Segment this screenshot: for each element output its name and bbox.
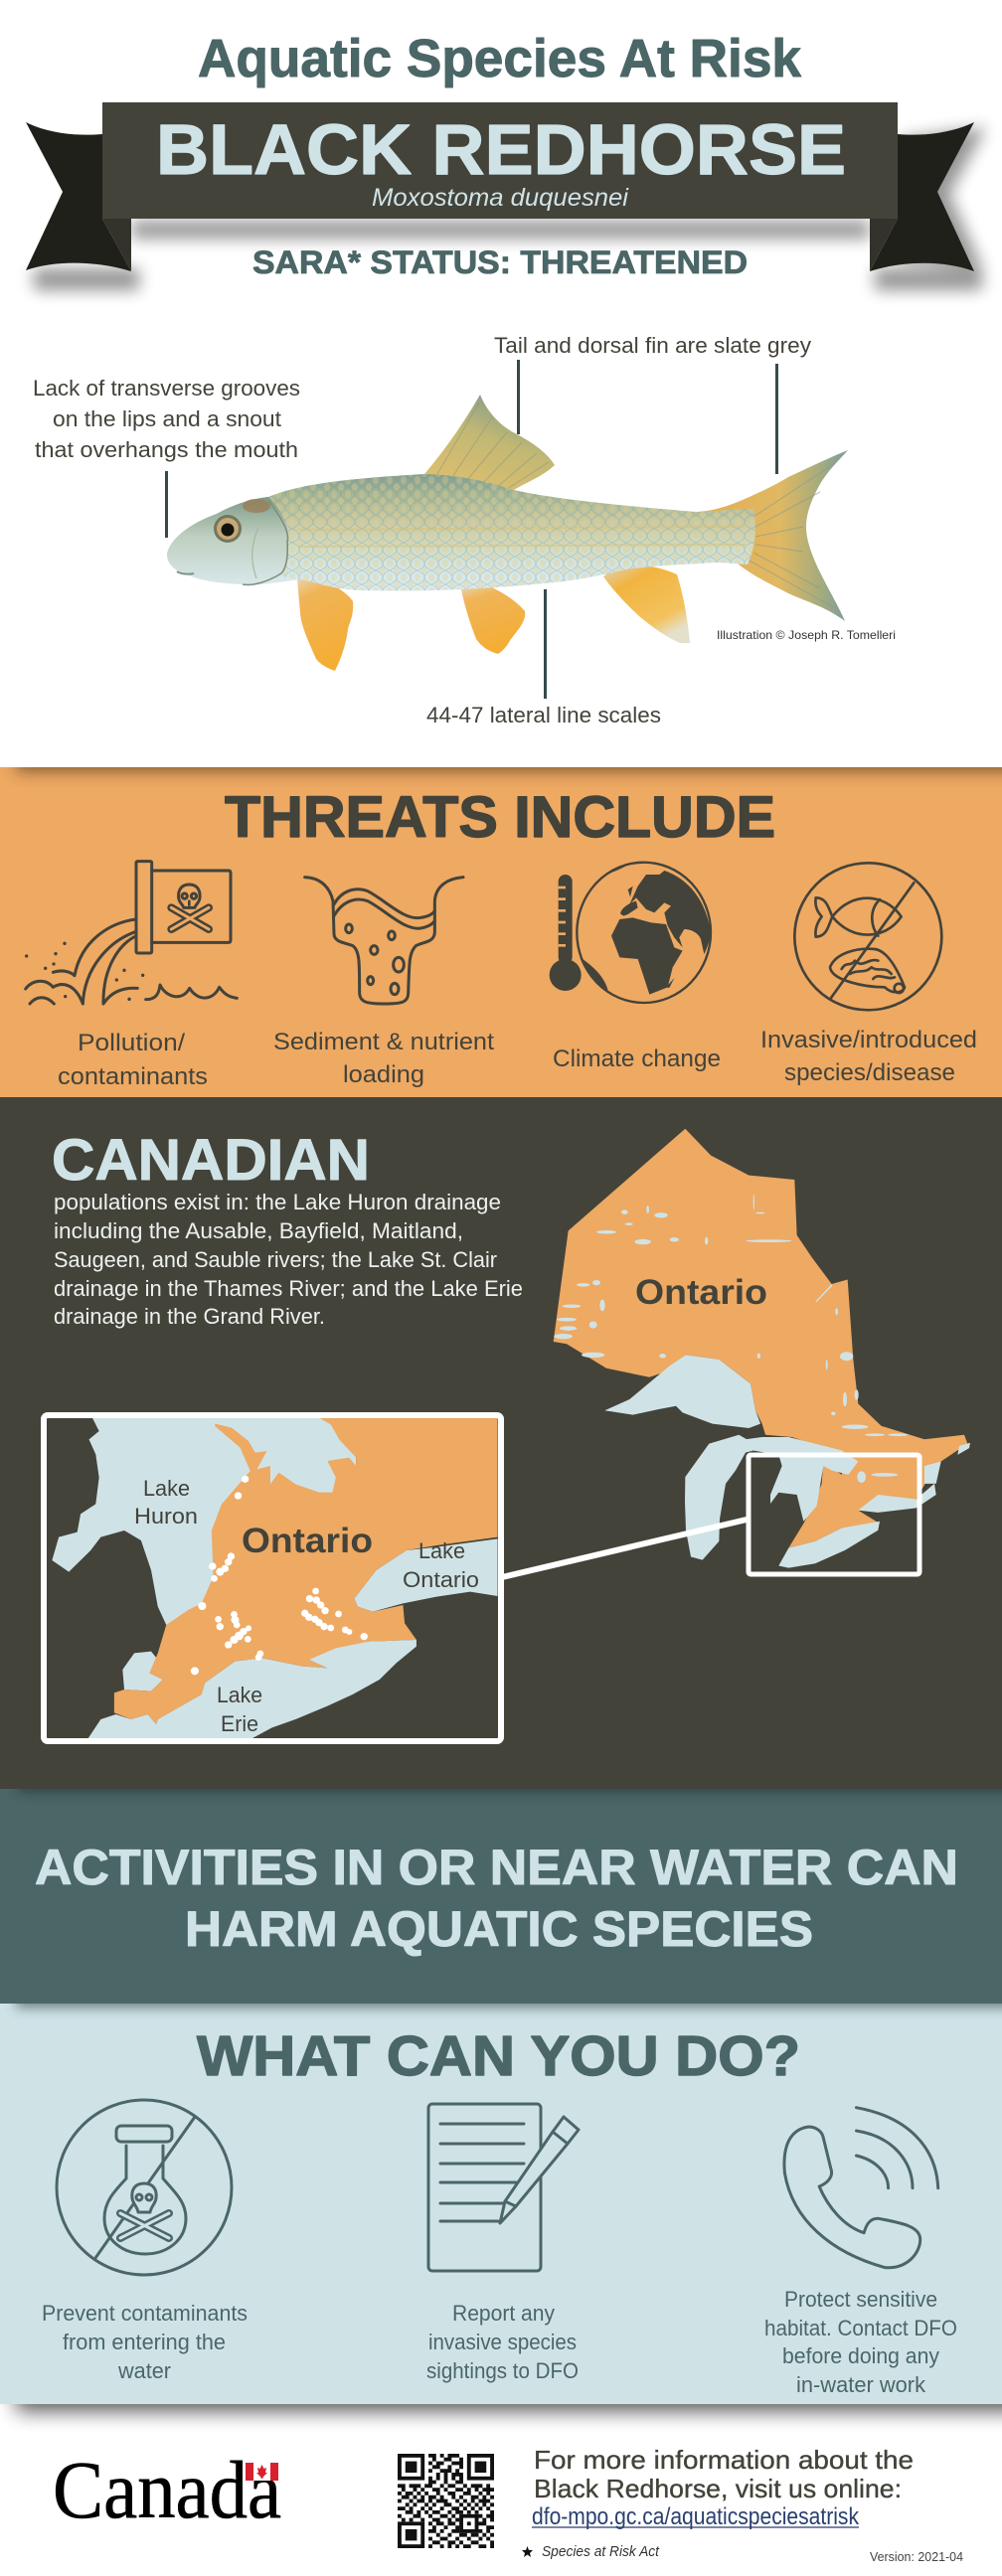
label: lake erie: Lake <box>217 1683 262 1707</box>
ribbon shadow <box>34 127 986 290</box>
label: report sightings: invasive species <box>428 2330 577 2354</box>
label: pollution: contaminants <box>58 1063 208 1090</box>
map locator box <box>749 1455 919 1574</box>
version: Version: 2021-04 <box>870 2549 963 2564</box>
banner text: HARM AQUATIC SPECIES <box>185 1901 813 1957</box>
label: prevent contaminants: Prevent contaminants <box>42 2301 248 2326</box>
panel: what can you do <box>0 1988 1002 2404</box>
panel: header <box>26 29 986 290</box>
icon: climate change <box>550 863 711 1003</box>
leader line <box>544 589 547 699</box>
leader line <box>517 360 520 434</box>
more information text: Black Redhorse, visit us online: <box>534 2474 902 2503</box>
heading: WHAT CAN YOU DO? <box>197 2024 800 2088</box>
label: inset ontario: Ontario <box>242 1522 373 1560</box>
icon: phone <box>784 2108 938 2268</box>
label: ontario: Ontario <box>635 1273 767 1312</box>
label: lake huron: Lake <box>143 1476 190 1501</box>
label: protect habitat: in-water work <box>796 2372 926 2397</box>
fish <box>167 395 848 671</box>
panel: distribution <box>0 1097 1002 1789</box>
label: sediment: Sediment & nutrient <box>273 1029 494 1055</box>
label: lips and snout: that overhangs the mouth <box>35 437 298 462</box>
label: climate: Climate change <box>553 1046 721 1072</box>
icon: pollution <box>25 862 237 1004</box>
label: protect habitat: Protect sensitive <box>784 2287 937 2312</box>
population text: Saugeen, and Sauble rivers; the Lake St. Clair <box>54 1247 497 1272</box>
label: lips and snout: on the lips and a snout <box>53 406 281 431</box>
map: ontario <box>554 1129 970 1568</box>
footnote: Species at Risk Act <box>542 2543 660 2560</box>
panel: fish illustration <box>33 333 896 727</box>
banner ribbon <box>26 102 974 271</box>
label: scales: 44-47 lateral line scales <box>426 703 661 727</box>
leader line <box>165 471 168 538</box>
leader line <box>775 364 778 474</box>
population text: populations exist in: the Lake Huron drainage <box>54 1190 501 1214</box>
label: invasive: species/disease <box>784 1059 955 1086</box>
species name: BLACK REDHORSE <box>156 111 846 190</box>
label: report sightings: Report any <box>452 2301 555 2326</box>
icon: no contaminants <box>57 2100 232 2275</box>
more information text: For more information about the <box>534 2445 914 2475</box>
status: SARA* STATUS: THREATENED <box>252 244 748 280</box>
inset map: southern ontario <box>44 1415 501 1741</box>
label: tail and dorsal: Tail and dorsal fin are slate grey <box>494 333 811 358</box>
icon: report notepad <box>428 2104 579 2271</box>
heading: canadian: CANADIAN <box>52 1128 370 1193</box>
panel: activities banner <box>0 1774 1002 2004</box>
population text: including the Ausable, Bayfield, Maitland, <box>54 1218 463 1243</box>
label: invasive: Invasive/introduced <box>760 1027 977 1053</box>
label: protect habitat: before doing any <box>782 2343 939 2368</box>
qr code <box>398 2456 494 2546</box>
label: prevent contaminants: from entering the <box>63 2330 226 2354</box>
population text: drainage in the Thames River; and the Lake Erie <box>54 1276 523 1301</box>
icon: invasive species <box>794 863 941 1010</box>
title: Aquatic Species At Risk <box>198 29 802 88</box>
label: report sightings: sightings to DFO <box>426 2358 579 2383</box>
scientific name: Moxostoma duquesnei <box>372 184 629 212</box>
canada wordmark: Canada <box>53 2444 281 2535</box>
label: protect habitat: habitat. Contact DFO <box>764 2316 957 2340</box>
panel: footer <box>2 2404 1002 2561</box>
population dots <box>191 1476 368 1675</box>
population text: drainage in the Grand River. <box>54 1304 325 1329</box>
label: pollution: Pollution/ <box>78 1030 185 1056</box>
label: lips and snout: Lack of transverse grooves <box>33 376 300 401</box>
label: lake erie: Erie <box>221 1711 258 1736</box>
label: sediment: loading <box>343 1061 424 1088</box>
label: prevent contaminants: water <box>117 2358 171 2383</box>
banner text: ACTIVITIES IN OR NEAR WATER CAN <box>35 1840 958 1895</box>
footnote star <box>522 2546 533 2557</box>
label: lake ontario: Lake <box>418 1538 465 1563</box>
label: lake huron: Huron <box>134 1504 198 1529</box>
connector line <box>502 1520 747 1577</box>
credit: Illustration © Joseph R. Tomelleri <box>717 628 896 642</box>
panel: threats <box>0 747 1002 1097</box>
icon: sediment <box>305 878 463 1004</box>
website link: dfo-mpo.gc.ca/aquaticspeciesatrisk <box>532 2503 860 2530</box>
heading: threats include: THREATS INCLUDE <box>225 785 775 850</box>
label: lake ontario: Ontario <box>403 1567 479 1592</box>
